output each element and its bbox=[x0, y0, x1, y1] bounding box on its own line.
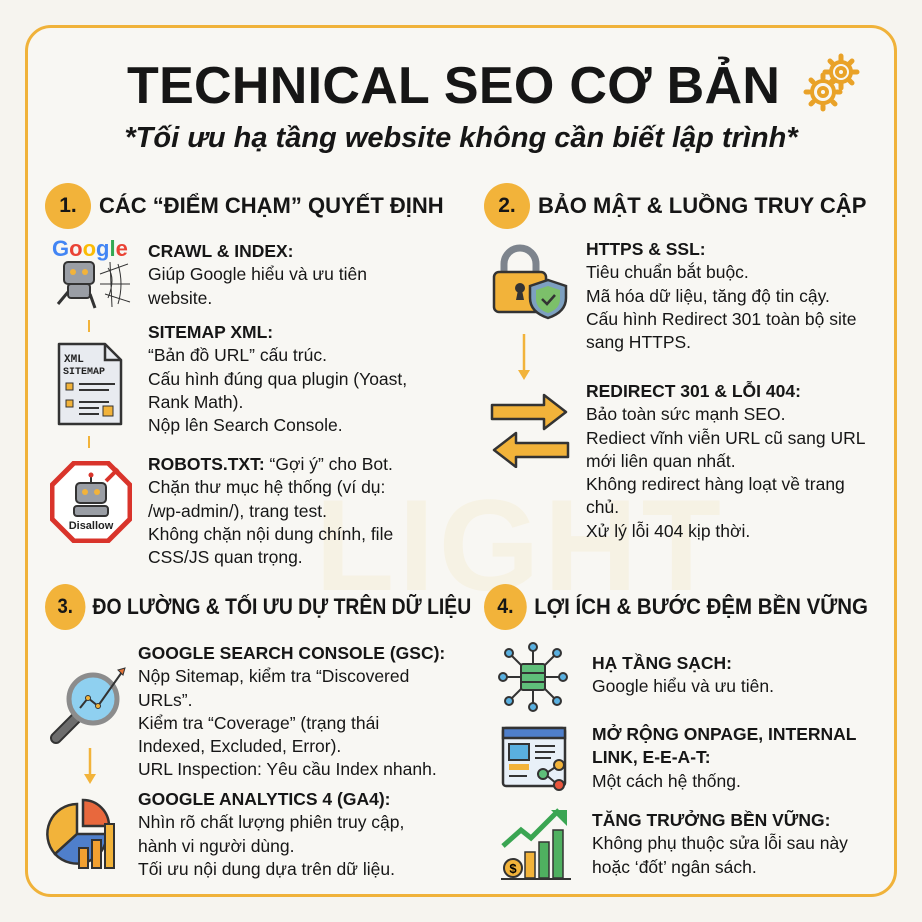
text: sitemap xml: Cấu hình đúng qua plugin (Yoast, bbox=[148, 369, 407, 389]
icon: disallow robot: Disallow bbox=[69, 520, 114, 532]
text: robots.txt: CSS/JS quan trọng. bbox=[148, 547, 303, 567]
text: ga4: Nhìn rõ chất lượng phiên truy cập, bbox=[138, 812, 404, 832]
icon: growth chart bbox=[501, 808, 571, 880]
text: redirect 301: REDIRECT 301 & LỖI 404: bbox=[586, 381, 801, 401]
text: robots.txt: ROBOTS.TXT: “Gợi ý” cho Bot. bbox=[148, 454, 393, 474]
text: gsc: Kiểm tra “Coverage” (trạng thái bbox=[138, 713, 379, 733]
text: gsc: URLs”. bbox=[138, 690, 192, 710]
text: sitemap xml: Rank Math). bbox=[148, 392, 243, 412]
text: sitemap xml: SITEMAP XML: bbox=[148, 322, 273, 342]
icon: onpage browser bbox=[502, 726, 566, 791]
text: robots.txt: Chặn thư mục hệ thống (ví dụ: bbox=[148, 477, 385, 497]
text: sitemap xml: “Bản đồ URL” cấu trúc. bbox=[148, 345, 327, 365]
icon: google crawler: Google bbox=[52, 236, 128, 261]
connector bbox=[88, 320, 90, 332]
text: ha tang sach: HẠ TẦNG SẠCH: bbox=[592, 653, 732, 673]
arrow: down bbox=[518, 334, 530, 380]
text: tang truong: Không phụ thuộc sửa lỗi sau này bbox=[592, 833, 848, 853]
text: https & ssl: sang HTTPS. bbox=[586, 332, 691, 352]
icon: padlock with shield bbox=[492, 244, 568, 320]
text: crawl & index bbox=[148, 241, 367, 308]
text: tang truong: hoặc ‘đốt’ ngân sách. bbox=[592, 857, 757, 877]
text: https & ssl: Tiêu chuẩn bắt buộc. bbox=[586, 262, 749, 282]
panel 4 heading: LỢI ÍCH & BƯỚC ĐỆM BỀN VỮNG bbox=[534, 594, 868, 619]
text: mo rong onpage: Một cách hệ thống. bbox=[592, 771, 741, 791]
text: tang truong bbox=[592, 810, 848, 877]
panel 1 heading bbox=[45, 183, 444, 229]
text: mo rong onpage: LINK, E-E-A-T: bbox=[592, 747, 711, 767]
text: sitemap xml: Nộp lên Search Console. bbox=[148, 415, 343, 435]
text: redirect 301: chủ. bbox=[586, 497, 619, 517]
icon: pie and bars bbox=[46, 798, 115, 869]
text: ga4: Tối ưu nội dung dựa trên dữ liệu. bbox=[138, 859, 395, 879]
panel 2 heading bbox=[484, 183, 866, 229]
text: ga4: GOOGLE ANALYTICS 4 (GA4): bbox=[138, 789, 390, 809]
text: gsc: Indexed, Excluded, Error). bbox=[138, 736, 341, 756]
icon: redirect arrows bbox=[490, 394, 570, 468]
text: robots.txt: Không chặn nội dung chính, file bbox=[148, 524, 393, 544]
text: gsc bbox=[138, 643, 445, 779]
text: ha tang sach: Google hiểu và ưu tiên. bbox=[592, 676, 774, 696]
text: https & ssl: Cấu hình Redirect 301 toàn bộ site bbox=[586, 309, 856, 329]
icon: xml sitemap bbox=[58, 342, 122, 426]
text: crawl & index: website. bbox=[148, 288, 212, 308]
text: redirect 301: Rediect vĩnh viễn URL cũ sang URL bbox=[586, 428, 866, 448]
text: tang truong: TĂNG TRƯỞNG BỀN VỮNG: bbox=[592, 810, 830, 830]
text: redirect 301: Không redirect hàng loạt về trang bbox=[586, 474, 845, 494]
panel 2 heading: BẢO MẬT & LUỒNG TRUY CẬP bbox=[538, 193, 866, 218]
text: redirect 301: mới liên quan nhất. bbox=[586, 451, 736, 471]
panel 2 heading: 2. bbox=[498, 194, 516, 217]
icon: xml sitemap: XML bbox=[64, 354, 84, 366]
text: mo rong onpage: MỞ RỘNG ONPAGE, INTERNAL bbox=[592, 724, 856, 744]
text: redirect 301 bbox=[586, 381, 866, 541]
panel 3 heading: 3. bbox=[58, 595, 73, 618]
text: robots.txt: /wp-admin/), trang test. bbox=[148, 501, 327, 521]
panel 4 heading: 4. bbox=[497, 595, 514, 618]
panel 3 heading: ĐO LƯỜNG & TỐI ƯU DỰ TRÊN DỮ LIỆU bbox=[93, 594, 471, 619]
text: https & ssl bbox=[586, 239, 856, 352]
panel 4 heading bbox=[484, 584, 868, 630]
icon: magnifier chart bbox=[50, 667, 126, 744]
text: robots.txt bbox=[148, 454, 393, 567]
text: crawl & index: Giúp Google hiểu và ưu tiên bbox=[148, 264, 367, 284]
text: https & ssl: HTTPS & SSL: bbox=[586, 239, 706, 259]
panel 3 heading bbox=[45, 584, 471, 630]
arrow: down bbox=[84, 748, 96, 784]
text: TECHNICAL SEO CƠ BẢN bbox=[127, 57, 780, 115]
text: gsc: URL Inspection: Yêu cầu Index nhanh. bbox=[138, 759, 437, 779]
subtitle: *Tối ưu hạ tầng website không cần biết lập trình* bbox=[124, 122, 798, 154]
text: mo rong onpage bbox=[592, 724, 856, 791]
watermark: LIGHT bbox=[315, 472, 725, 618]
text: ga4: hành vi người dùng. bbox=[138, 836, 294, 856]
connector bbox=[88, 436, 90, 448]
text: https & ssl: Mã hóa dữ liệu, tăng độ tin cậy. bbox=[586, 286, 830, 306]
icon: growth chart: $ bbox=[509, 861, 517, 876]
icon: xml sitemap: SITEMAP bbox=[63, 367, 105, 378]
icon: network server bbox=[498, 642, 568, 712]
panel 1 heading: CÁC “ĐIỂM CHẠM” QUYẾT ĐỊNH bbox=[99, 193, 444, 218]
icon: google crawler bbox=[52, 236, 130, 308]
text: redirect 301: Bảo toàn sức mạnh SEO. bbox=[586, 404, 785, 424]
text: gsc: GOOGLE SEARCH CONSOLE (GSC): bbox=[138, 643, 445, 663]
text: sitemap xml bbox=[148, 322, 407, 435]
panel 1 heading: 1. bbox=[59, 194, 77, 217]
text: ga4 bbox=[138, 789, 404, 879]
text: gsc: Nộp Sitemap, kiểm tra “Discovered bbox=[138, 666, 409, 686]
text: crawl & index: CRAWL & INDEX: bbox=[148, 241, 294, 261]
icon: disallow robot bbox=[50, 461, 132, 543]
text: redirect 301: Xử lý lỗi 404 kịp thời. bbox=[586, 521, 750, 541]
text: ha tang sach bbox=[592, 653, 774, 696]
icon: gears bbox=[804, 54, 860, 112]
